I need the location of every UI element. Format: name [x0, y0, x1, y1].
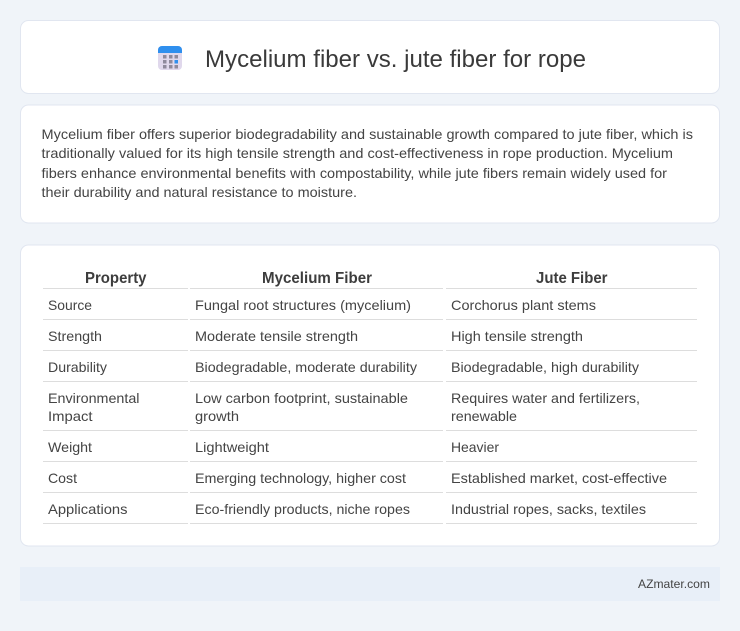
row: strength: Moderate tensile strength — [195, 328, 358, 344]
row: applications — [43, 501, 697, 524]
row: source — [43, 297, 697, 320]
description text: their durability and natural resistance to moisture. — [42, 184, 357, 200]
row: environmental impact: growth — [195, 408, 239, 424]
row: environmental impact — [43, 390, 697, 431]
panel: description — [20, 105, 720, 223]
row: source: Corchorus plant stems — [451, 297, 596, 313]
row: environmental impact: renewable — [451, 408, 517, 424]
row: durability — [43, 359, 697, 382]
table header row: Jute Fiber — [536, 270, 608, 287]
row: strength — [43, 328, 697, 351]
table header row: Mycelium Fiber — [262, 270, 372, 287]
panel: comparison table — [20, 245, 720, 546]
description text — [42, 126, 693, 200]
row: weight: Heavier — [451, 439, 499, 455]
row: strength: High tensile strength — [451, 328, 583, 344]
table header row — [43, 270, 697, 289]
row: durability: Biodegradable, high durability — [451, 359, 639, 375]
row: environmental impact: Environmental — [48, 390, 140, 406]
row: weight — [43, 439, 697, 462]
row: durability: Durability — [48, 359, 107, 375]
row: applications: Applications — [48, 501, 128, 517]
row: cost: Established market, cost-effective — [451, 470, 667, 486]
table header row: Property — [85, 270, 147, 287]
row: durability: Biodegradable, moderate durability — [195, 359, 417, 375]
icon: calendar — [158, 46, 182, 70]
title: Mycelium fiber vs. jute fiber for rope — [205, 46, 586, 73]
description text: fibers enhance environmental benefits with compostability, while jute fibers remain widely used for — [42, 165, 667, 181]
row: cost: Emerging technology, higher cost — [195, 470, 406, 486]
row: source: Fungal root structures (mycelium) — [195, 297, 411, 313]
footer bar — [20, 567, 720, 601]
footer source label: AZmater.com — [638, 577, 710, 591]
row: strength: Strength — [48, 328, 102, 344]
row: weight: Weight — [48, 439, 92, 455]
row: source: Source — [48, 297, 92, 313]
description text: traditionally valued for its high tensile strength and cost-effectiveness in rope production. Mycelium — [42, 145, 673, 161]
row: applications: Industrial ropes, sacks, textiles — [451, 501, 646, 517]
row: applications: Eco-friendly products, niche ropes — [195, 501, 410, 517]
row: cost — [43, 470, 697, 493]
panel: title header — [20, 20, 720, 94]
row: environmental impact: Low carbon footprint, sustainable — [195, 390, 408, 406]
row: environmental impact: Impact — [48, 408, 93, 424]
row: weight: Lightweight — [195, 439, 269, 455]
description text: Mycelium fiber offers superior biodegradability and sustainable growth compared to jute fiber, which is — [42, 126, 693, 142]
row: cost: Cost — [48, 470, 77, 486]
row: environmental impact: Requires water and fertilizers, — [451, 390, 640, 406]
